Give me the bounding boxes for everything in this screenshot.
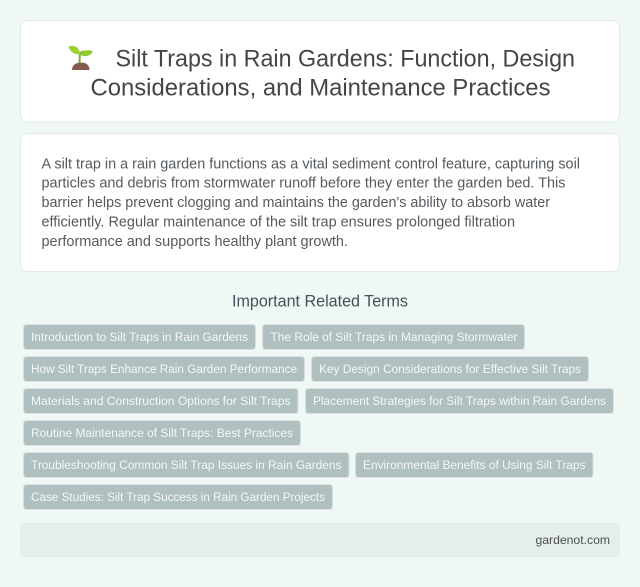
related terms tags [24, 324, 614, 510]
tag: placement [306, 388, 614, 414]
tag: placement: Placement Strategies for Silt Traps within Rain Gardens [313, 394, 606, 408]
tag: design: Key Design Considerations for Effective Silt Traps [319, 362, 581, 376]
tag: environmental [356, 452, 593, 478]
heading: important related terms: Important Related Terms [232, 293, 408, 311]
tag: troubleshooting [24, 452, 349, 478]
footer [20, 523, 620, 557]
title [90, 46, 575, 102]
description text: A silt trap in a rain garden functions as a vital sediment control feature, capturing soil [42, 156, 580, 172]
tag: maintenance: Routine Maintenance of Silt Traps: Best Practices [31, 426, 293, 440]
tag: materials: Materials and Construction Options for Silt Traps [31, 394, 290, 408]
tag: case studies: Case Studies: Silt Trap Success in Rain Garden Projects [31, 490, 325, 504]
panel: description [20, 134, 620, 272]
description text: performance and supports healthy plant growth. [42, 234, 348, 250]
description text: efficiently. Regular maintenance of the silt trap ensures prolonged filtration [42, 214, 515, 230]
tag: maintenance [24, 420, 300, 446]
description text: barrier helps prevent clogging and maintains the garden's ability to absorb water [42, 195, 550, 211]
title: Considerations, and Maintenance Practices [90, 75, 550, 102]
header panel [20, 20, 620, 122]
tag: introduction: Introduction to Silt Traps in Rain Gardens [31, 330, 248, 344]
tag: role [262, 324, 524, 350]
tag: environmental: Environmental Benefits of Using Silt Traps [363, 458, 586, 472]
icon: seedling [68, 46, 93, 70]
tag: performance: How Silt Traps Enhance Rain Garden Performance [31, 362, 297, 376]
tag: performance [24, 356, 304, 382]
description text: particles and debris from stormwater runoff before they enter the garden bed. This [42, 176, 566, 192]
footer credit: gardenot.com [536, 533, 610, 547]
description text [42, 156, 580, 250]
tag: troubleshooting: Troubleshooting Common Silt Trap Issues in Rain Gardens [31, 458, 342, 472]
tag: introduction [24, 324, 256, 350]
tag: materials [24, 388, 298, 414]
title: Silt Traps in Rain Gardens: Function, Design [116, 46, 575, 73]
tag: design [312, 356, 588, 382]
tag: case studies [24, 484, 332, 510]
tag: role: The Role of Silt Traps in Managing Stormwater [270, 330, 518, 344]
